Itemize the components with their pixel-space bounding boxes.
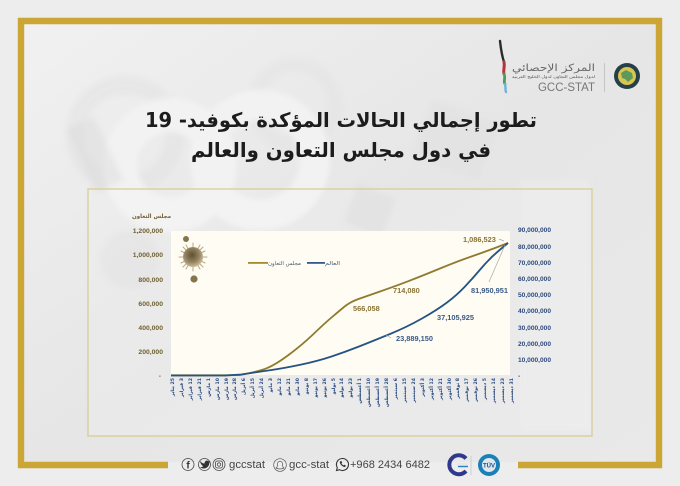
right axis labels: 60,000,000 xyxy=(518,276,551,283)
date axis labels: 19 مارس xyxy=(224,378,230,400)
date axis labels: 14 يوليو xyxy=(339,377,345,398)
left axis title: مجلس التعاون xyxy=(132,214,172,220)
left axis labels: - xyxy=(159,373,161,380)
date axis labels: 17 نوفمبر xyxy=(464,378,470,403)
data labels: 714,080 xyxy=(393,286,420,295)
legend xyxy=(248,261,340,267)
date axis labels: 23 يوليو xyxy=(348,378,354,398)
date axis labels: 21 أكتوبر xyxy=(437,378,444,401)
icon: facebook: f xyxy=(186,460,190,472)
date axis labels: 17 يونيو xyxy=(313,378,319,398)
leader lines xyxy=(386,239,505,338)
title: تطور إجمالي الحالات المؤكدة بكوفيد- 19 xyxy=(145,108,537,133)
date axis labels: 1 مارس xyxy=(206,378,212,397)
date axis labels: 6 سبتمبر xyxy=(393,377,399,400)
line: GCC xyxy=(171,243,508,375)
icon: whatsapp xyxy=(336,458,348,470)
right axis labels: - xyxy=(518,373,520,380)
icon: twitter xyxy=(198,458,210,470)
data labels: 566,058 xyxy=(353,304,380,313)
icon: TUV badge: TÜV xyxy=(483,462,495,470)
panel: chart xyxy=(88,189,592,436)
right axis labels: 30,000,000 xyxy=(518,325,551,332)
icon: TUV badge xyxy=(478,454,500,476)
date axis labels: 5 ديسمبر xyxy=(482,378,488,401)
left axis labels xyxy=(133,228,163,380)
icon: colored swoosh xyxy=(500,41,506,92)
date axis labels: 12 أكتوبر xyxy=(428,378,435,401)
logo arabic name: المركز الإحصائي xyxy=(512,63,595,74)
date axis labels: 24 سبتمبر xyxy=(411,377,417,404)
logo latin name: GCC-STAT xyxy=(538,82,595,94)
date axis labels: 19 أغسطس xyxy=(374,378,381,407)
date axis labels: 12 فبراير xyxy=(188,378,194,401)
date axis labels: 15 أبريل xyxy=(249,378,256,398)
date axis labels: 26 نوفمبر xyxy=(473,377,479,403)
plot area xyxy=(171,231,510,375)
left axis labels: 800,000 xyxy=(138,277,163,284)
date axis labels: 15 سبتمبر xyxy=(402,378,408,404)
date axis labels: 14 ديسمبر xyxy=(491,377,497,404)
line: world xyxy=(171,243,508,376)
right axis labels: 40,000,000 xyxy=(518,308,551,315)
left axis labels: 200,000 xyxy=(138,349,163,356)
date axis labels: 25 يناير xyxy=(170,378,176,397)
icon: snapchat xyxy=(274,459,286,471)
icon: certification G xyxy=(449,455,468,474)
logo subtitle: لدول مجلس التعاون لدول الخليج العربية xyxy=(512,74,595,79)
right axis labels: 50,000,000 xyxy=(518,292,551,299)
date axis labels: 8 نوفمبر xyxy=(455,378,461,400)
icon: virus xyxy=(179,236,207,283)
date axis labels: 28 مارس xyxy=(232,378,238,400)
legend: العالم xyxy=(325,261,340,267)
date axis labels: 6 أبريل xyxy=(240,377,247,395)
date axis labels: 31 ديسمبر xyxy=(509,378,515,404)
data labels: 23,889,150 xyxy=(396,334,433,343)
date axis labels: 26 يونيو xyxy=(322,377,328,398)
left axis labels: 1,200,000 xyxy=(133,228,163,235)
handle: gccstat xyxy=(229,459,266,471)
date axis labels: 3 أكتوبر xyxy=(419,378,426,398)
icon: facebook xyxy=(182,458,194,472)
left axis labels: 400,000 xyxy=(138,325,163,332)
date axis labels: 21 فبراير xyxy=(197,378,203,401)
icon: GCC emblem xyxy=(614,63,640,89)
date axis labels: 28 أغسطس xyxy=(383,378,390,407)
right axis labels: 80,000,000 xyxy=(518,244,551,251)
right axis labels: 20,000,000 xyxy=(518,341,551,348)
date axis labels: 24 أبريل xyxy=(258,377,265,398)
date axis labels: 23 ديسمبر xyxy=(500,378,506,404)
date axis labels: 21 مايو xyxy=(286,378,292,397)
right axis labels xyxy=(518,227,551,380)
left axis labels: 1,000,000 xyxy=(133,252,163,259)
handle: gcc-stat xyxy=(289,459,330,471)
left axis labels: 600,000 xyxy=(138,301,163,308)
date axis labels: 10 مارس xyxy=(215,377,221,400)
date axis labels: 3 فبراير xyxy=(179,378,185,398)
phone number: +968 2434 6482 xyxy=(350,459,430,471)
data labels: 1,086,523 xyxy=(463,235,496,244)
date axis labels: 12 مايو xyxy=(277,378,283,397)
date axis labels: 30 أكتوبر xyxy=(446,377,453,401)
title: في دول مجلس التعاون والعالم xyxy=(191,138,491,163)
date axis labels: 1 أغسطس xyxy=(356,378,363,404)
title xyxy=(145,108,537,163)
date axis labels: 8 يونيو xyxy=(304,378,310,395)
logo: GCC-STAT xyxy=(500,41,640,94)
date axis labels: 3 مايو xyxy=(268,378,274,393)
date axis labels xyxy=(170,377,515,407)
data labels: 81,950,951 xyxy=(471,286,508,295)
date axis labels: 10 أغسطس xyxy=(365,377,372,407)
right axis labels: 10,000,000 xyxy=(518,357,551,364)
date axis labels: 5 يوليو xyxy=(331,378,337,395)
icon: instagram xyxy=(213,458,225,470)
date axis labels: 30 مايو xyxy=(295,377,301,397)
right axis labels: 70,000,000 xyxy=(518,260,551,267)
legend: مجلس التعاون xyxy=(268,261,301,267)
data labels: 37,105,925 xyxy=(437,313,474,322)
footer contacts xyxy=(182,454,500,476)
data labels xyxy=(353,235,508,343)
right axis labels: 90,000,000 xyxy=(518,227,551,234)
